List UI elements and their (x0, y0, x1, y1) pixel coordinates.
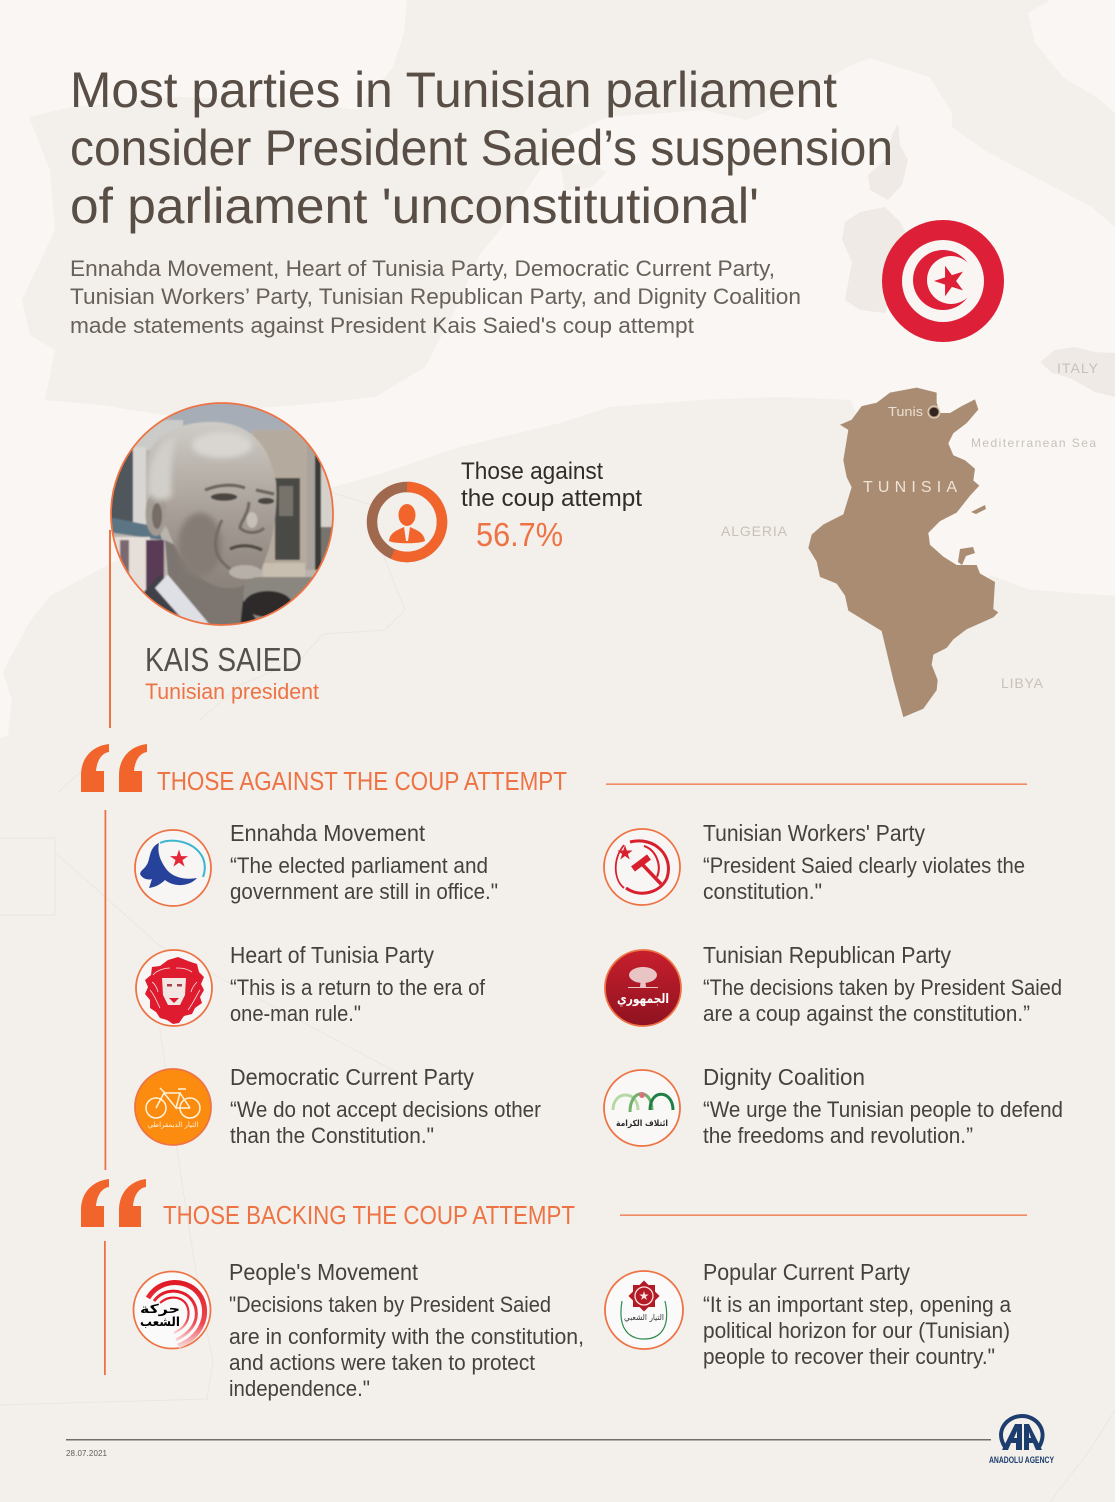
map labels: Mediterranean Sea (971, 436, 1096, 450)
stat text: the coup attempt (461, 485, 642, 512)
logo: Republican Party: الجمهوري (617, 992, 669, 1007)
party: Heart of Tunisia Party: one-man rule." (230, 1001, 361, 1026)
party: Dignity Coalition: “We urge the Tunisian people to defend (703, 1097, 1063, 1122)
map labels: ITALY (1057, 360, 1099, 376)
president name: KAIS SAIED (145, 641, 302, 678)
party: Dignity Coalition: Dignity Coalition (703, 1064, 865, 1090)
stat text (461, 458, 642, 553)
heading: those against: THOSE AGAINST THE COUP ATTEMPT (157, 766, 567, 796)
icon: quote mark backing (81, 1179, 146, 1227)
party: Tunisian Workers' Party: constitution." (703, 879, 822, 904)
logo: People's Movement: حركة (140, 1301, 180, 1316)
party: Dignity Coalition (604, 1064, 1063, 1148)
party: Tunisian Workers' Party (604, 820, 1025, 905)
party: Popular Current Party: Popular Current Party (703, 1259, 910, 1285)
logo: Republican Party (605, 950, 681, 1026)
logo: Dignity Coalition: ائتلاف الكرامة (616, 1119, 668, 1129)
Tunis marker (888, 404, 940, 419)
party: Tunisian Republican Party: are a coup against the constitution.” (703, 1001, 1030, 1026)
forehead highlight (192, 432, 252, 458)
party: People's Movement: "Decisions taken by President Saied (229, 1292, 551, 1317)
party: Tunisian Republican Party: Tunisian Republican Party (703, 942, 951, 968)
party: Ennahda Movement: “The elected parliament and (230, 853, 488, 878)
donut stat icon (372, 487, 442, 557)
icon: person (389, 504, 425, 543)
party: Popular Current Party: political horizon for our (Tunisian) (703, 1318, 1010, 1343)
subtitle: Ennahda Movement, Heart of Tunisia Party, Democratic Current Party, (70, 256, 775, 281)
logo: Workers' Party (604, 829, 680, 905)
president name: Tunisian president (145, 679, 319, 704)
party: People's Movement: independence." (229, 1376, 370, 1401)
map: Tunisia (808, 388, 998, 717)
party: Popular Current Party: people to recover their country." (703, 1344, 995, 1369)
map labels: LIBYA (1001, 675, 1044, 691)
logo: Heart of Tunisia (136, 950, 212, 1026)
subtitle: made statements against President Kais Saied's coup attempt (70, 313, 694, 338)
party: Ennahda Movement: Ennahda Movement (230, 820, 426, 846)
head (147, 422, 276, 588)
party: Popular Current Party: “It is an important step, opening a (703, 1292, 1012, 1317)
logo: Anadolu Agency (989, 1416, 1054, 1466)
ear (145, 496, 165, 537)
logo: Dignity Coalition (604, 1070, 680, 1146)
footer rule (66, 1439, 991, 1440)
logo: People's Movement: الشعب (140, 1314, 180, 1329)
party: Ennahda Movement: government are still in office." (230, 879, 498, 904)
date: 28.07.2021 (66, 1449, 108, 1458)
icon: quote mark against (81, 744, 147, 792)
land: Corsica (868, 124, 908, 200)
party: Democratic Current Party: than the Constitution." (230, 1123, 434, 1148)
party: Tunisian Workers' Party: Tunisian Workers' Party (703, 820, 925, 846)
face shadow (178, 513, 222, 577)
portrait: Kais Saied (108, 403, 340, 630)
Djerba island (958, 547, 975, 565)
stat text: 56.7% (476, 516, 563, 553)
logo: Democratic Current (135, 1069, 211, 1145)
hair side (148, 436, 175, 500)
party: Tunisian Republican Party (605, 942, 1062, 1026)
title: consider President Saied’s suspension (70, 120, 893, 176)
country label: TUNISIA (863, 479, 957, 496)
party: Heart of Tunisia Party: Heart of Tunisia Party (230, 942, 434, 968)
party: Tunisian Republican Party: “The decisions taken by President Saied (703, 975, 1062, 1000)
title (70, 62, 893, 234)
party: Democratic Current Party (135, 1064, 541, 1148)
borders (0, 490, 1115, 1502)
land: Sardinia (842, 207, 910, 313)
logo: Democratic Current: التيار الديمقراطي (148, 1121, 198, 1129)
neck (165, 540, 245, 628)
Tunis marker: Tunis (888, 404, 924, 419)
subtitle (70, 256, 801, 338)
land: Balearic island (560, 163, 607, 190)
title: Most parties in Tunisian parliament (70, 62, 837, 118)
logo: People's Movement (134, 1272, 210, 1348)
land: Sicily (1040, 347, 1115, 397)
president name (145, 641, 319, 704)
logo: Anadolu Agency: ANADOLU AGENCY (989, 1455, 1054, 1466)
party: Popular Current Party (605, 1259, 1012, 1369)
connector line from portrait (109, 530, 111, 728)
party: Heart of Tunisia Party (136, 942, 486, 1026)
sea (0, 0, 1115, 738)
party: Tunisian Workers' Party: “President Saied clearly violates the (703, 853, 1025, 878)
Kerkennah island (971, 505, 986, 514)
party: People's Movement: People's Movement (229, 1259, 419, 1285)
party: Heart of Tunisia Party: “This is a return to the era of (230, 975, 486, 1000)
subtitle: Tunisian Workers’ Party, Tunisian Republican Party, and Dignity Coalition (70, 284, 801, 309)
land: Libya (900, 575, 1115, 1502)
map labels: ALGERIA (721, 523, 788, 539)
title: of parliament 'unconstitutional' (70, 178, 759, 234)
party: Democratic Current Party: “We do not accept decisions other (230, 1097, 541, 1122)
logo: Popular Current: التيار الشعبي (624, 1313, 664, 1322)
stat text: Those against (461, 458, 603, 485)
heading: those backing: THOSE BACKING THE COUP ATTEMPT (163, 1200, 575, 1230)
logo: Ennahda (135, 830, 211, 906)
right white edge (1115, 0, 1120, 1502)
party: Ennahda Movement (135, 820, 498, 906)
party: People's Movement: are in conformity with the constitution, (229, 1324, 584, 1349)
icon: Tunisian flag (882, 220, 1004, 342)
map labels (721, 360, 1099, 691)
party: People's Movement (134, 1259, 584, 1401)
party: Dignity Coalition: the freedoms and revolution.” (703, 1123, 973, 1148)
party: People's Movement: and actions were taken to protect (229, 1350, 535, 1375)
party: Democratic Current Party: Democratic Current Party (230, 1064, 474, 1090)
land: Europe and Iberia (22, 0, 1115, 415)
logo: Popular Current (605, 1271, 683, 1349)
